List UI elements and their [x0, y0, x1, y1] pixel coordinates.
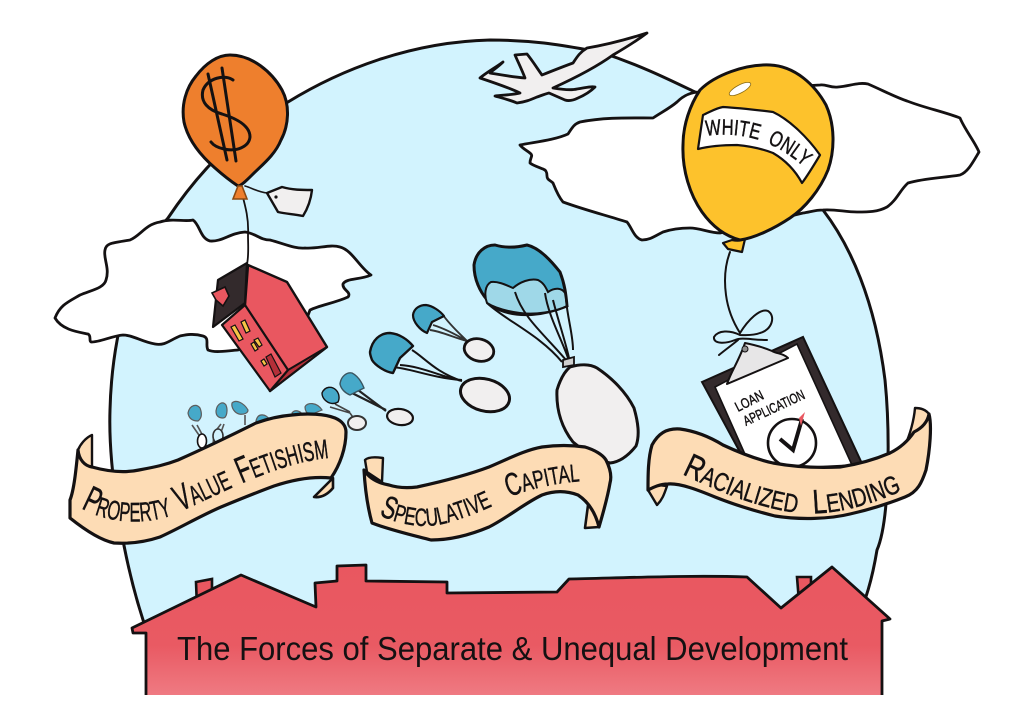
tiny parachutes row — [188, 401, 322, 448]
banner: property value fetishism — [68, 412, 348, 545]
clipboard — [702, 337, 865, 480]
balloon knot — [723, 239, 745, 252]
small upper parachute with egg — [413, 305, 496, 365]
loan application text: LOAN — [732, 387, 766, 415]
parachute lines and eggs — [192, 415, 245, 448]
title: The Forces of Separate & Unequal Development — [177, 630, 848, 667]
parachute canopies — [188, 401, 322, 428]
floating red house — [212, 263, 327, 391]
red pencil tip — [799, 412, 805, 426]
string and bow — [714, 252, 772, 355]
check circle — [768, 419, 816, 467]
left cloud — [55, 220, 371, 352]
egg balloon — [557, 365, 638, 463]
banner curl — [365, 457, 383, 482]
banner tail — [585, 490, 604, 528]
balloon string and house tether — [241, 190, 248, 264]
roofline silhouette — [132, 565, 890, 695]
banner curl — [905, 408, 930, 455]
canopy lower folds — [485, 279, 567, 314]
house front wall — [222, 305, 288, 391]
dollar sign — [202, 68, 250, 161]
house side wall — [245, 265, 327, 391]
banner text: SPECULATIVE CAPITAL — [381, 464, 580, 526]
white only text: WHITE ONLY — [704, 119, 814, 164]
check mark — [780, 419, 802, 450]
banner body — [648, 414, 930, 518]
medium parachute with egg — [370, 333, 513, 417]
banner tail — [648, 484, 667, 505]
banner body — [70, 414, 346, 543]
paper — [715, 344, 852, 470]
roofline ink — [132, 565, 890, 695]
balloon knot — [233, 186, 247, 199]
white only banner — [698, 107, 820, 183]
left chimney — [196, 579, 212, 608]
balloon body — [683, 65, 833, 240]
red dormer — [212, 287, 229, 306]
large parachute with egg — [474, 245, 638, 463]
loan application text — [732, 386, 807, 429]
banner tail — [314, 478, 333, 497]
clip — [727, 343, 788, 384]
suspension lines — [487, 292, 573, 362]
balloon body — [183, 55, 288, 186]
small parachute with egg 1 — [322, 387, 366, 430]
banner curl — [78, 435, 92, 470]
dark roof — [213, 263, 247, 327]
loan application text: APPLICATION — [741, 386, 807, 429]
right chimney — [797, 577, 811, 602]
small parachute with egg 2 — [340, 373, 414, 427]
price tag — [245, 186, 312, 216]
clip hole — [742, 346, 748, 352]
banner text: PROPERTY VALUE FETISHISM — [82, 439, 328, 522]
house skyline — [132, 565, 890, 695]
neck — [563, 357, 574, 367]
icon: fighter jet — [480, 33, 647, 103]
house end wall — [270, 347, 327, 391]
board — [702, 337, 865, 480]
right cloud — [520, 83, 979, 240]
banner text: RACIALIZED LENDING — [684, 454, 900, 514]
yellow balloon with clipboard — [681, 63, 862, 466]
orange balloon with dollar sign — [183, 55, 312, 264]
windows and door — [231, 320, 281, 377]
banner: racialized lending — [646, 406, 932, 520]
canopy — [474, 245, 567, 315]
banner: speculative capital — [362, 444, 612, 542]
banner body — [364, 446, 611, 540]
globe background — [110, 40, 888, 640]
balloon highlight — [728, 80, 752, 98]
